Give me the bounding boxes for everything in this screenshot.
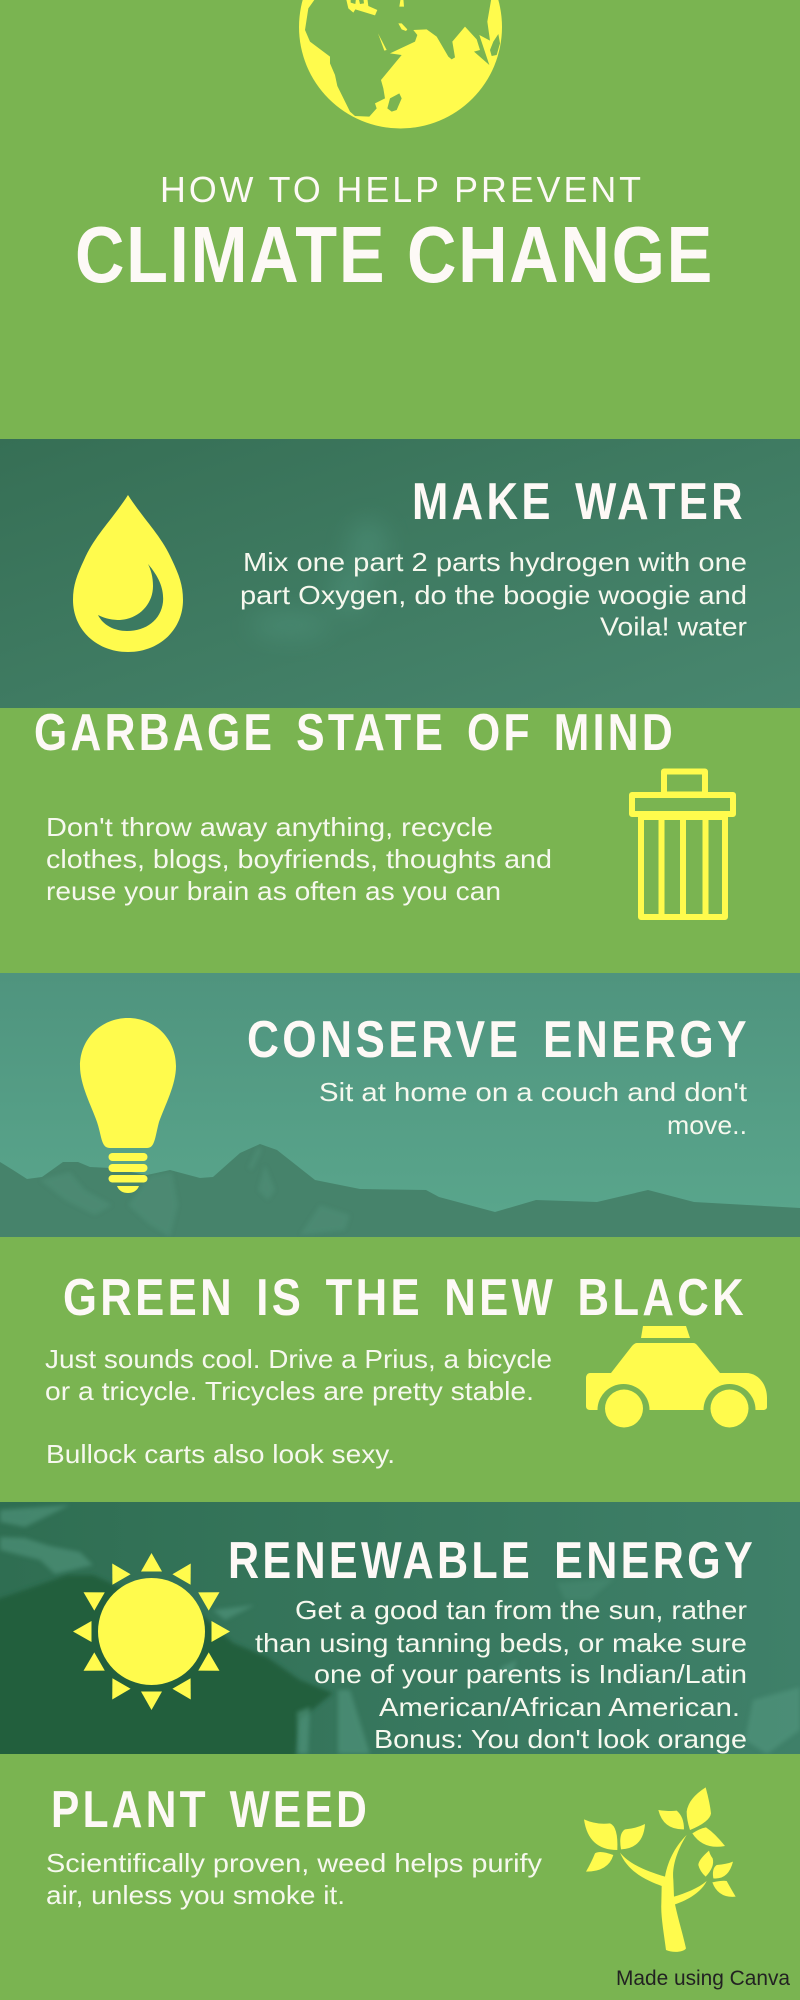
text: renewable body: one of your parents is Indian/Latin xyxy=(314,1659,747,1689)
text: plant weed body: air, unless you smoke it. xyxy=(46,1880,345,1910)
panel: plant weed xyxy=(46,1781,736,1952)
text: renewable body: Bonus: You don't look orange xyxy=(374,1724,747,1754)
text: make water body: Mix one part 2 parts hydrogen with one xyxy=(243,547,747,577)
text: plant weed body: Scientifically proven, weed helps purify xyxy=(46,1848,542,1878)
text: conserve body: move.. xyxy=(667,1110,747,1140)
heading: plant weed: PLANT WEED xyxy=(51,1781,370,1839)
text: plant weed body xyxy=(46,1848,542,1910)
title: climate change: CLIMATE CHANGE xyxy=(75,210,714,299)
credit: made using canva: Made using Canva xyxy=(616,1967,790,1990)
text: green body xyxy=(45,1344,552,1469)
heading: how to help prevent: HOW TO HELP PREVENT xyxy=(160,169,644,210)
text: garbage body xyxy=(46,812,552,906)
icon: sun xyxy=(73,1553,230,1710)
icon: plant xyxy=(584,1787,736,1952)
text: green body: Bullock carts also look sexy. xyxy=(46,1439,395,1469)
panel: renewable energy xyxy=(0,1502,800,1760)
text: conserve body xyxy=(319,1077,748,1140)
panel: make water xyxy=(0,439,800,708)
text: make water body: Voila! water xyxy=(600,612,747,642)
text: green body: Just sounds cool. Drive a Prius, a bicycle xyxy=(45,1344,552,1374)
icon: trash bin xyxy=(632,772,733,917)
text: garbage body: clothes, blogs, boyfriends, thoughts and xyxy=(46,844,552,874)
icon: taxi car xyxy=(586,1326,767,1436)
mountains backdrop xyxy=(0,1144,800,1237)
text: garbage body: reuse your brain as often as you can xyxy=(46,876,501,906)
icon: water drop xyxy=(73,495,183,652)
panel: green is the new black xyxy=(45,1269,767,1469)
panel: conserve energy xyxy=(0,973,800,1237)
text: renewable body: than using tanning beds, or make sure xyxy=(255,1628,747,1658)
text: green body: or a tricycle. Tricycles are pretty stable. xyxy=(45,1376,534,1406)
text: conserve body: Sit at home on a couch and don't xyxy=(319,1077,748,1107)
icon: light bulb xyxy=(80,1018,176,1193)
text: renewable body xyxy=(255,1595,747,1754)
panel: garbage state of mind xyxy=(34,704,733,917)
heading: garbage state of mind: GARBAGE STATE OF MIND xyxy=(34,704,676,762)
text: make water body xyxy=(240,547,747,642)
text: renewable body: American/African American. xyxy=(379,1692,740,1722)
heading: make water: MAKE WATER xyxy=(412,473,746,531)
text: make water body: part Oxygen, do the boogie woogie and xyxy=(240,580,747,610)
text: garbage body: Don't throw away anything, recycle xyxy=(46,812,493,842)
text: renewable body: Get a good tan from the sun, rather xyxy=(295,1595,747,1625)
icon: globe xyxy=(299,0,502,128)
